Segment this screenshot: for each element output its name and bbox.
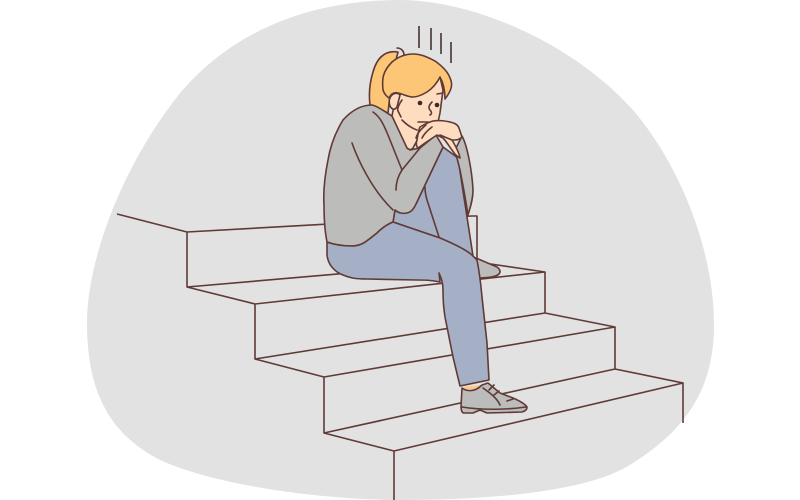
- background blob: [87, 0, 714, 500]
- near shoe: [461, 383, 527, 413]
- near thigh and lower leg: [327, 222, 489, 386]
- hair tail under ear: [398, 100, 402, 117]
- hair: [383, 54, 452, 99]
- shoe laces and sole: [462, 385, 526, 409]
- ear: [389, 93, 400, 109]
- sweater body: [324, 105, 443, 246]
- far sleeve: [455, 136, 473, 215]
- neck and face: [392, 77, 443, 150]
- far leg inner line: [425, 187, 439, 237]
- eyes: [418, 101, 439, 107]
- stairs: [117, 214, 683, 500]
- ankle: [463, 385, 482, 391]
- hand: [416, 121, 462, 158]
- woman figure: [324, 48, 527, 413]
- worry lines above head: [419, 26, 451, 63]
- far shoe: [476, 258, 500, 278]
- finger lines: [416, 125, 452, 140]
- ponytail: [369, 52, 398, 113]
- sweater fold lines: [352, 112, 420, 210]
- far leg: [393, 147, 473, 256]
- nose, brow, mouth, jaw: [402, 93, 443, 130]
- hair tie: [397, 48, 404, 55]
